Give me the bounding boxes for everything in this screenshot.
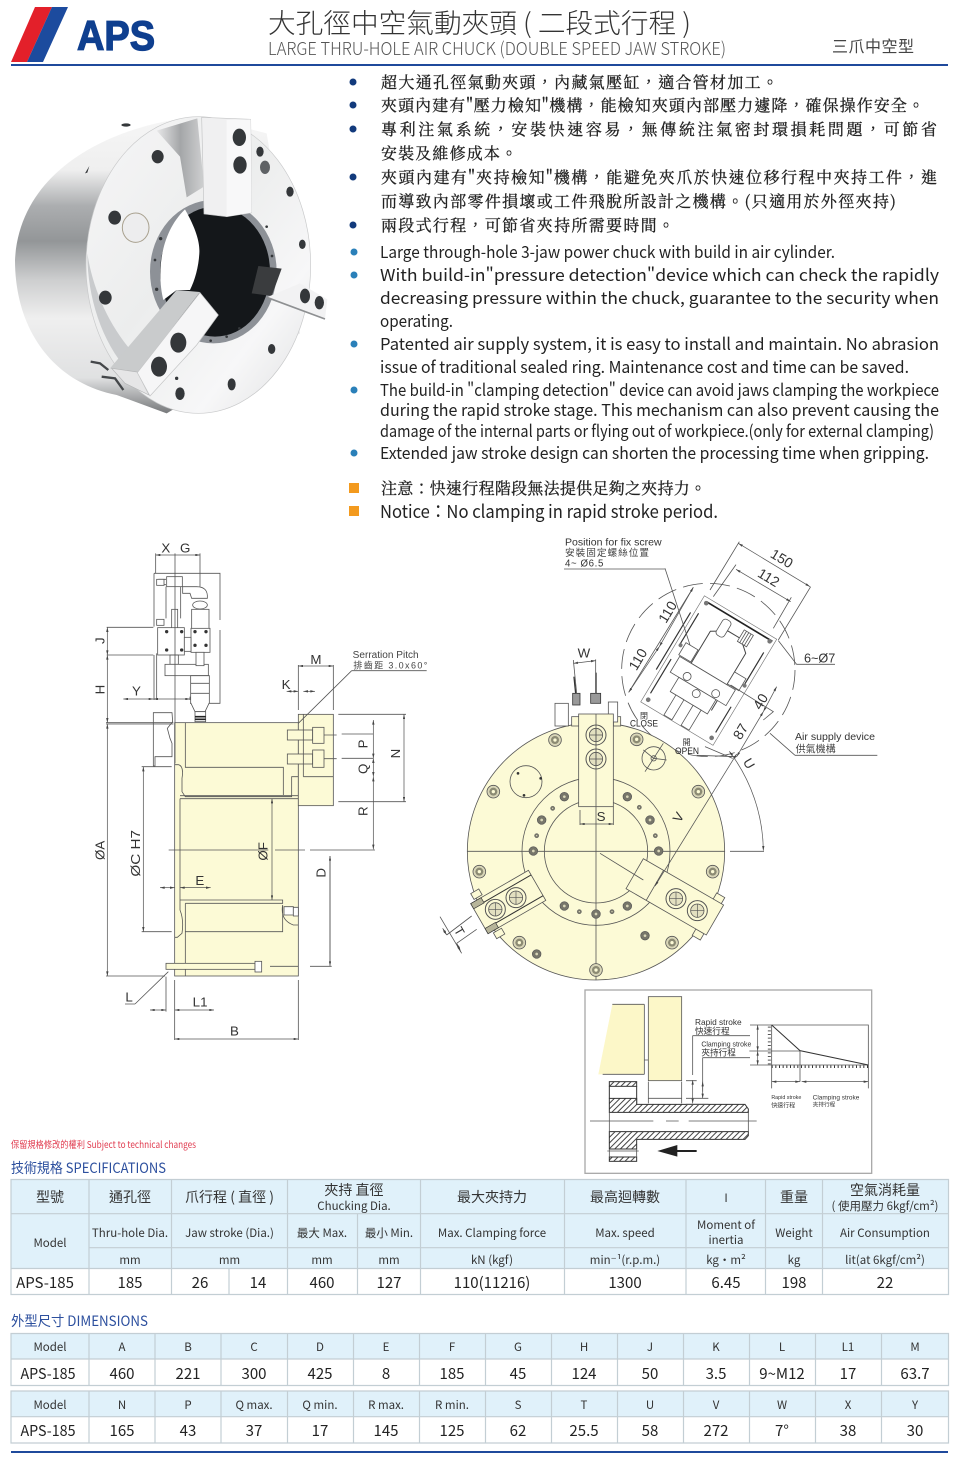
dimension labels: V bbox=[670, 809, 687, 825]
table: dimensions N to Y: Q max. bbox=[235, 1397, 273, 1413]
dimension labels: 40 bbox=[750, 690, 771, 712]
air supply device bbox=[622, 583, 795, 757]
screw position note: 4~ Ø6.5 bbox=[565, 559, 603, 570]
table: specifications: 最大 Max. bbox=[297, 1225, 347, 1241]
dimension labels: 112 bbox=[755, 565, 783, 590]
feature list: English: decreasing pressure within the chuck, guarantee to the security when bbox=[380, 285, 939, 309]
table: specifications: mm bbox=[119, 1252, 141, 1268]
rear fitting bbox=[153, 713, 173, 766]
notice: 注意：快速行程階段無法提供足夠之夾持力。 bbox=[381, 476, 706, 499]
table: dimensions N to Y: R min. bbox=[435, 1397, 469, 1413]
dimension labels: ØC H7 bbox=[128, 830, 143, 877]
table: dimensions N to Y: R max. bbox=[368, 1397, 404, 1413]
table: specifications: kN (kgf) bbox=[471, 1252, 513, 1268]
dimension lines bbox=[440, 542, 877, 953]
dimension labels: X bbox=[161, 541, 170, 556]
bolts bbox=[473, 733, 719, 976]
feature list: Chinese: 安裝及維修成本。 bbox=[381, 141, 517, 164]
table: dimensions A to M: 460 bbox=[110, 1363, 134, 1384]
table: dimensions N to Y: 58 bbox=[642, 1420, 658, 1441]
drawing: stroke diagram bbox=[585, 990, 872, 1173]
table: dimensions A to M: 124 bbox=[572, 1363, 596, 1384]
stroke labels bbox=[695, 1017, 860, 1109]
dimension labels: ØF bbox=[255, 842, 270, 861]
serration pitch note bbox=[353, 650, 428, 670]
air valve assembly bbox=[154, 573, 220, 722]
table: specifications: ( 使用壓力 6kgf/cm²) bbox=[832, 1198, 938, 1214]
table: specifications: 127 bbox=[377, 1272, 401, 1293]
dimension labels: 110 bbox=[625, 645, 650, 673]
dimension labels: K bbox=[282, 677, 291, 692]
dimension labels bbox=[451, 546, 835, 938]
dimension labels: B bbox=[230, 1023, 239, 1038]
chuck body bbox=[175, 723, 303, 976]
rod bbox=[166, 961, 298, 972]
dimension labels: W bbox=[578, 645, 591, 660]
table: specifications: I bbox=[724, 1190, 728, 1206]
table: dimensions A to M: Model bbox=[33, 1339, 67, 1355]
jaw block and bolts bbox=[284, 714, 337, 916]
table: dimensions A to M: 63.7 bbox=[900, 1363, 930, 1384]
table: dimensions N to Y: S bbox=[515, 1397, 522, 1413]
dimension labels: D bbox=[313, 868, 328, 878]
dimension labels: L1 bbox=[193, 995, 207, 1010]
feature list: Chinese: 夾頭內建有"壓力檢知"機構，能檢知夾頭內部壓力遽降，確保操作安全。 bbox=[381, 93, 924, 116]
table: dimensions N to Y: 25.5 bbox=[569, 1420, 599, 1441]
table: dimensions A to M: L1 bbox=[842, 1339, 854, 1355]
left jaw bbox=[466, 863, 550, 941]
table: dimensions A to M: G bbox=[514, 1339, 522, 1355]
dimension labels: R bbox=[355, 806, 370, 816]
table: specifications: Chucking Dia. bbox=[317, 1198, 391, 1214]
arrow bbox=[657, 1145, 697, 1157]
notice: Notice：No clamping in rapid stroke period. bbox=[380, 498, 718, 524]
feature list: English bbox=[350, 239, 939, 464]
heading: dimensions: 外型尺寸 DIMENSIONS bbox=[11, 1311, 148, 1331]
table: dimensions N to Y: P bbox=[184, 1397, 192, 1413]
table: dimensions A to M: D bbox=[316, 1339, 324, 1355]
hatched piston bbox=[590, 1082, 757, 1161]
dimension labels: J bbox=[93, 637, 108, 644]
table: dimensions N to Y bbox=[11, 1391, 948, 1443]
feature list: Chinese: 夾頭內建有"夾持檢知"機構，能避免夾爪於快速位移行程中夾持工件，進 bbox=[381, 165, 937, 188]
screw position note: Position for fix screw bbox=[565, 538, 662, 549]
air supply note: Air supply device bbox=[795, 732, 875, 743]
table: dimensions N to Y: APS-185 bbox=[20, 1420, 76, 1441]
feature list: English: Extended jaw stroke design can shorten the processing time when gripping. bbox=[380, 440, 929, 464]
dimension lines bbox=[106, 553, 427, 1040]
yellow jaw profile bbox=[598, 997, 682, 1081]
stroke labels: 快速行程 bbox=[695, 1025, 730, 1036]
feature list: English: operating. bbox=[380, 308, 453, 332]
drawing: front view with air supply device bbox=[440, 538, 877, 980]
table: specifications: 爪行程 ( 直徑 ) bbox=[185, 1187, 274, 1207]
top jaw bbox=[555, 673, 621, 807]
table: specifications: Thru-hole Dia. bbox=[92, 1225, 168, 1241]
dimension labels: E bbox=[195, 873, 204, 888]
table: dimensions N to Y: 7° bbox=[775, 1420, 789, 1441]
table: dimensions N to Y: X bbox=[845, 1397, 852, 1413]
table: dimensions A to M: 17 bbox=[840, 1363, 856, 1384]
table: specifications: Max. speed bbox=[595, 1225, 655, 1241]
dimension labels: 6~Ø7 bbox=[804, 652, 835, 666]
table: dimensions N to Y: Model bbox=[33, 1397, 67, 1413]
table: dimensions N to Y: 17 bbox=[312, 1420, 328, 1441]
dimension labels: 110 bbox=[655, 598, 680, 626]
stroke labels: 夾持行程 bbox=[701, 1047, 736, 1058]
table: dimensions A to M: 185 bbox=[440, 1363, 464, 1384]
feature list: English: Large through-hole 3-jaw power chuck with build in air cylinder. bbox=[380, 239, 835, 263]
close and open labels: OPEN bbox=[675, 746, 699, 756]
feature list: Chinese: 超大通孔徑氣動夾頭，內藏氣壓缸，適合管材加工。 bbox=[381, 70, 778, 93]
screw position note: 安裝固定螺絲位置 bbox=[565, 547, 649, 559]
serration pitch note: 排齒距 3.0x60° bbox=[353, 659, 428, 670]
feature list: Chinese: 而導致內部零件損壞或工件飛脫所設計之機構。(只適用於外徑夾持) bbox=[381, 189, 896, 212]
drawing: side view with dimensions bbox=[93, 541, 428, 1040]
table: dimensions N to Y: 125 bbox=[440, 1420, 464, 1441]
table: specifications: kg·m² bbox=[706, 1252, 746, 1268]
table: specifications: 最高迴轉數 bbox=[590, 1187, 660, 1207]
stroke labels: Clamping stroke bbox=[813, 1094, 860, 1101]
feature list: English: Patented air supply system, it is easy to install and maintain. No abrasion bbox=[380, 331, 939, 355]
table: specifications: 型號 bbox=[36, 1187, 64, 1207]
table: specifications: kg bbox=[788, 1252, 801, 1268]
table: dimensions A to M: 221 bbox=[176, 1363, 200, 1384]
table: dimensions A to M: C bbox=[250, 1339, 258, 1355]
table: specifications: Air Consumption bbox=[840, 1225, 930, 1241]
close and open labels: 開 bbox=[683, 738, 691, 747]
feature list: English: With build-in"pressure detection"device which can check the rapidly bbox=[380, 262, 939, 286]
table: specifications: mm bbox=[311, 1252, 333, 1268]
table: specifications bbox=[11, 1180, 948, 1294]
table: dimensions N to Y: T bbox=[581, 1397, 588, 1413]
table: specifications: Weight bbox=[775, 1225, 813, 1241]
feature list: Chinese: 專利注氣系統，安裝快速容易，無傳統注氣密封環損耗問題，可節省 bbox=[381, 117, 937, 140]
logo: APS bbox=[11, 7, 155, 62]
table: dimensions N to Y: 145 bbox=[374, 1420, 398, 1441]
right jaw bbox=[600, 853, 727, 941]
title: English: LARGE THRU-HOLE AIR CHUCK (DOUBLE SPEED JAW STROKE) bbox=[268, 35, 726, 61]
table: specifications: Max. Clamping force bbox=[438, 1225, 546, 1241]
chuck face bbox=[467, 723, 725, 980]
table: dimensions N to Y: Y bbox=[911, 1397, 919, 1413]
table: specifications: 198 bbox=[782, 1272, 806, 1293]
dimension labels: 150 bbox=[768, 546, 796, 571]
table: specifications: 6.45 bbox=[711, 1272, 741, 1293]
dimension labels: Y bbox=[132, 684, 141, 699]
dimension labels: M bbox=[310, 652, 321, 667]
dimension labels: Q bbox=[355, 764, 370, 774]
feature list: Chinese: 兩段式行程，可節省夾持所需要時間。 bbox=[381, 213, 674, 236]
graph bbox=[686, 1025, 868, 1104]
table: specifications: mm bbox=[219, 1252, 240, 1268]
table: specifications: APS-185 bbox=[16, 1272, 74, 1293]
table: specifications: Jaw stroke (Dia.) bbox=[185, 1225, 274, 1241]
dimension labels: 87 bbox=[730, 720, 751, 742]
table: specifications: lit(at 6kgf/cm²) bbox=[845, 1252, 925, 1268]
logo: APS: APS bbox=[77, 12, 155, 59]
table: specifications: 460 bbox=[310, 1272, 334, 1293]
dimension labels bbox=[93, 541, 403, 1038]
product photo: chuck bbox=[15, 117, 327, 413]
table: dimensions A to M: M bbox=[910, 1339, 920, 1355]
dimension labels: G bbox=[180, 541, 190, 556]
heading: specifications: 技術規格 SPECIFICATIONS bbox=[11, 1158, 166, 1178]
table: specifications: 空氣消耗量 bbox=[850, 1180, 920, 1200]
header rule bbox=[11, 64, 948, 66]
stroke labels: Rapid stroke bbox=[771, 1095, 801, 1101]
screw position note bbox=[565, 538, 662, 570]
table: dimensions N to Y: U bbox=[646, 1397, 654, 1413]
dimension labels: L bbox=[125, 990, 133, 1005]
table: specifications: 26 bbox=[192, 1272, 208, 1293]
air supply note bbox=[795, 732, 875, 755]
table: dimensions N to Y: 62 bbox=[510, 1420, 526, 1441]
table: dimensions N to Y: N bbox=[118, 1397, 126, 1413]
table: specifications: Model bbox=[33, 1235, 67, 1251]
table: specifications: Moment of bbox=[697, 1217, 756, 1233]
table: dimensions N to Y: 165 bbox=[110, 1420, 134, 1441]
table: specifications: 14 bbox=[250, 1272, 266, 1293]
table: specifications: inertia bbox=[709, 1232, 743, 1248]
table: specifications: 最大夾持力 bbox=[457, 1187, 527, 1207]
dimension labels: S bbox=[597, 809, 606, 824]
dimension labels: ØA bbox=[93, 841, 108, 860]
note: subject to technical changes: 保留規格修改的權利 Subject to technical changes bbox=[11, 1137, 196, 1151]
table: dimensions A to M: 300 bbox=[242, 1363, 266, 1384]
table: dimensions A to M: 45 bbox=[510, 1363, 526, 1384]
table: dimensions A to M: 425 bbox=[308, 1363, 332, 1384]
notice bbox=[349, 476, 718, 524]
stroke labels: 夾持行程 bbox=[813, 1100, 836, 1108]
table: dimensions N to Y: 272 bbox=[704, 1420, 728, 1441]
table: specifications: 最小 Min. bbox=[365, 1225, 413, 1241]
table: specifications: 185 bbox=[118, 1272, 142, 1293]
dimension labels: P bbox=[355, 739, 370, 748]
feature list: English: issue of traditional sealed ring. Maintenance cost and time can be saved. bbox=[380, 354, 909, 378]
title: Chinese: 大孔徑中空氣動夾頭 ( 二段式行程 ) bbox=[268, 2, 691, 41]
close and open labels: 閉 bbox=[640, 711, 648, 720]
table: dimensions A to M: A bbox=[118, 1339, 126, 1355]
table: dimensions N to Y: W bbox=[777, 1397, 787, 1413]
dimension labels: H bbox=[93, 685, 108, 694]
table: dimensions N to Y: 30 bbox=[907, 1420, 923, 1441]
table: dimensions N to Y: 43 bbox=[180, 1420, 196, 1441]
dimension labels: T bbox=[451, 924, 467, 938]
table: specifications: mm bbox=[378, 1252, 400, 1268]
table: dimensions N to Y: V bbox=[713, 1397, 720, 1413]
table: dimensions N to Y: 37 bbox=[246, 1420, 262, 1441]
table: specifications: 夾持 直徑 bbox=[324, 1180, 384, 1200]
footer rule bbox=[11, 1451, 948, 1453]
table: dimensions A to M: L bbox=[779, 1339, 785, 1355]
table: dimensions A to M: H bbox=[580, 1339, 588, 1355]
stroke labels: Clamping stroke bbox=[701, 1041, 751, 1048]
close and open labels bbox=[630, 711, 699, 756]
table: dimensions A to M: K bbox=[712, 1339, 720, 1355]
table: dimensions A to M: E bbox=[383, 1339, 390, 1355]
feature list: Chinese bbox=[350, 70, 937, 236]
table: dimensions A to M: 50 bbox=[642, 1363, 658, 1384]
table: dimensions A to M: APS-185 bbox=[20, 1363, 76, 1384]
table: dimensions A to M: 3.5 bbox=[706, 1363, 726, 1384]
table: specifications: 重量 bbox=[780, 1187, 808, 1207]
table: specifications: 22 bbox=[877, 1272, 893, 1293]
table: dimensions A to M: 8 bbox=[382, 1363, 390, 1384]
table: dimensions A to M: J bbox=[647, 1339, 653, 1355]
category label: 三爪中空型 bbox=[832, 33, 914, 57]
feature list: English: during the rapid stroke stage. This mechanism can also prevent causing the bbox=[380, 397, 939, 421]
table: specifications: 1300 bbox=[608, 1272, 642, 1293]
table: dimensions N to Y: 38 bbox=[840, 1420, 856, 1441]
air supply note: 供氣機構 bbox=[796, 742, 836, 755]
table: dimensions N to Y: Q min. bbox=[302, 1397, 338, 1413]
table: dimensions A to M: 9~M12 bbox=[759, 1363, 805, 1384]
table: dimensions A to M: F bbox=[449, 1339, 456, 1355]
table: dimensions A to M bbox=[11, 1334, 948, 1386]
serration pitch note: Serration Pitch bbox=[353, 650, 419, 661]
dimension labels: U bbox=[740, 756, 758, 772]
dimension labels: N bbox=[388, 749, 403, 758]
stroke labels: Rapid stroke bbox=[695, 1017, 742, 1027]
table: specifications: 通孔徑 bbox=[109, 1187, 151, 1207]
table: dimensions A to M: B bbox=[184, 1339, 192, 1355]
table: specifications: min⁻¹(r.p.m.) bbox=[590, 1252, 660, 1268]
stroke labels: 快速行程 bbox=[771, 1101, 795, 1109]
close and open labels: CLOSE bbox=[630, 719, 658, 729]
table: specifications: 110(11216) bbox=[454, 1272, 530, 1293]
